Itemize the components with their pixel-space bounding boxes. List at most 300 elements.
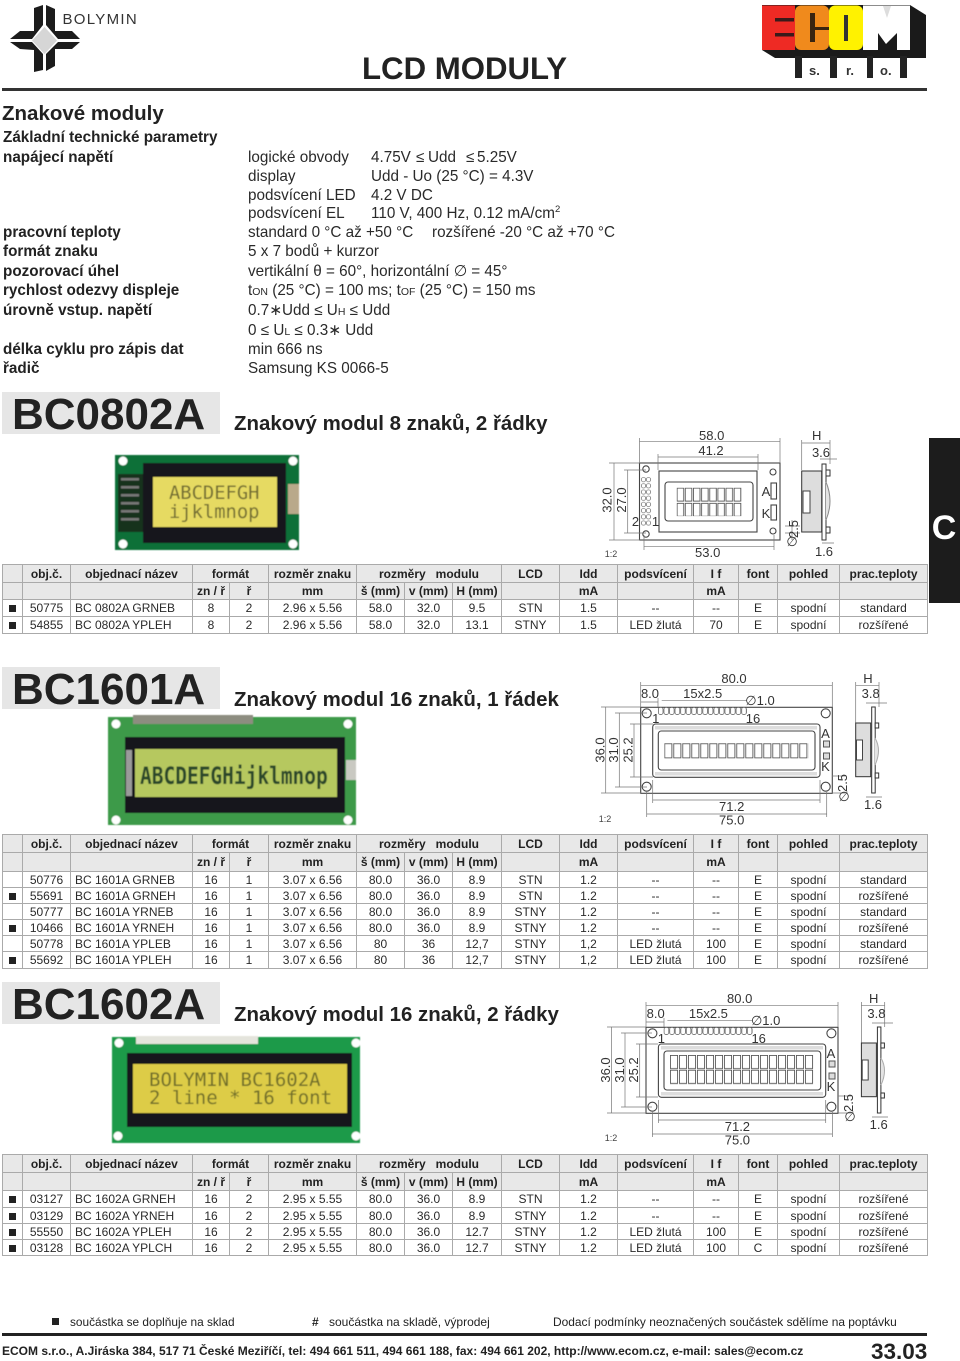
technical parameters: rychlost odezvy displeje xyxy=(3,282,179,299)
diagram: BC1601A dimensions: 80.0 xyxy=(721,671,747,686)
table: BC1601A parameters: 36 xyxy=(422,953,435,967)
table: BC0802A parameters: podsvícení xyxy=(624,566,687,580)
table: BC1601A parameters: BC 1601A YPLEH xyxy=(75,953,172,967)
table: BC1602A parameters: v (mm) xyxy=(409,1174,448,1188)
table: BC0802A parameters: H (mm) xyxy=(456,584,498,598)
table: BC1602A parameters: 36.0 xyxy=(417,1192,440,1206)
diagram: BC1602A dimensions xyxy=(598,991,893,1148)
table: BC1601A parameters: rozšířené xyxy=(858,889,909,903)
table: BC1602A parameters: 1.2 xyxy=(580,1241,597,1255)
table: BC1602A parameters: 1.2 xyxy=(580,1225,597,1239)
heading: BC1602A: Znakový modul 16 znaků, 2 řádky xyxy=(234,1003,559,1026)
table: BC1601A parameters: BC 1601A YPLEB xyxy=(75,937,171,951)
diagram: BC1601A dimensions: H xyxy=(863,671,873,686)
table: BC1602A parameters: rozměry modulu xyxy=(379,1156,479,1170)
table: BC1602A parameters: STNY xyxy=(514,1209,546,1223)
table: BC1601A parameters: standard xyxy=(860,905,907,919)
table: BC1602A parameters: obj.č. xyxy=(31,1156,62,1170)
table: BC1601A parameters: mA xyxy=(579,855,598,869)
table: BC1601A parameters: 1 xyxy=(246,873,252,887)
table: BC1602A parameters: 80.0 xyxy=(369,1241,392,1255)
table: BC0802A parameters: formát xyxy=(212,566,249,580)
table: BC1602A parameters: E xyxy=(754,1225,762,1239)
table: BC1602A parameters: 16 xyxy=(204,1209,218,1223)
table: BC0802A parameters: BC 0802A YPLEH xyxy=(75,618,172,632)
table: BC1602A parameters: 80.0 xyxy=(369,1209,392,1223)
table: BC1601A parameters: pohled xyxy=(789,836,828,850)
table: BC1601A parameters: 16 xyxy=(204,921,218,935)
table: BC1601A parameters: BC 1601A YRNEH xyxy=(75,921,174,935)
diagram: BC0802A dimensions: 1 xyxy=(652,514,659,529)
diagram: BC1602A dimensions: 71.2 xyxy=(725,1119,750,1134)
diagram: BC0802A dimensions: 1:2 xyxy=(605,549,617,559)
table: BC1602A parameters: rozšířené xyxy=(858,1241,909,1255)
legend: Dodací podmínky neoznačených součástek sdělíme na poptávku xyxy=(553,1315,897,1329)
legend: # xyxy=(312,1315,319,1329)
table: BC1601A parameters: 1 xyxy=(246,937,252,951)
table: BC0802A parameters: Idd xyxy=(580,566,598,580)
diagram: BC1602A dimensions: ∅ xyxy=(844,1109,856,1124)
table: BC0802A parameters: obj.č. xyxy=(31,566,62,580)
table: BC1602A parameters: I f xyxy=(711,1156,721,1170)
table: BC0802A parameters: mm xyxy=(302,584,323,598)
photo: BC0802A module: ABCDEFGH xyxy=(169,483,259,504)
table: BC1601A parameters: 1 xyxy=(246,921,252,935)
title: LCD MODULY xyxy=(362,51,567,86)
technical parameters: Udd - Uo (25 °C) = 4.3V xyxy=(371,168,534,185)
table: BC1601A parameters: prac.teploty xyxy=(849,836,918,850)
table: BC1601A parameters: E xyxy=(754,889,762,903)
photo: BC1602A module xyxy=(112,1036,360,1143)
table: BC0802A parameters: -- xyxy=(712,601,720,615)
footer contact: ECOM s.r.o., A.Jiráska 384, 517 71 České Meziříčí, tel: 494 661 511, 494 661 188, fax: 494 661 202, http://www.ecom.cz, e-mail: sales@ecom.cz xyxy=(2,1343,803,1358)
photo: BC1602A module: 2 line * 16 font xyxy=(149,1087,332,1109)
table: BC0802A parameters: 1.5 xyxy=(580,601,597,615)
table: BC1602A parameters: rozšířené xyxy=(858,1209,909,1223)
table: BC1601A parameters: rozšířené xyxy=(858,921,909,935)
table: BC1601A parameters: font xyxy=(747,836,769,850)
table: BC1601A parameters: E xyxy=(754,921,762,935)
table: BC1601A parameters: -- xyxy=(712,873,720,887)
table: BC1601A parameters: standard xyxy=(860,937,907,951)
table: BC1601A parameters: 36 xyxy=(422,937,435,951)
table: BC1602A parameters: BC 1602A YPLEH xyxy=(75,1225,172,1239)
table: BC1601A parameters: 1,2 xyxy=(580,953,597,967)
diagram: BC1602A dimensions: 80.0 xyxy=(727,991,752,1006)
table: BC0802A parameters: 1.5 xyxy=(580,618,597,632)
table: BC1602A parameters: 16 xyxy=(204,1225,218,1239)
legend: součástka se doplňuje na sklad xyxy=(70,1315,235,1329)
table: BC1601A parameters: zn / ř xyxy=(197,855,225,869)
table: BC1602A parameters: E xyxy=(754,1209,762,1223)
table: BC1602A parameters: 03128 xyxy=(30,1241,63,1255)
diagram: BC0802A dimensions: 27.0 xyxy=(614,487,629,513)
table: BC1601A parameters: rozšířené xyxy=(858,953,909,967)
diagram: BC1601A dimensions: 3.8 xyxy=(862,686,880,701)
table: BC1602A parameters: 36.0 xyxy=(417,1225,440,1239)
logo: ECOM s.r.o.: s. xyxy=(809,63,820,78)
table: BC1601A parameters: 16 xyxy=(204,873,218,887)
diagram: BC0802A dimensions: 2.5 xyxy=(786,520,801,538)
diagram: BC1601A dimensions: 25.2 xyxy=(620,737,636,763)
table: BC1601A parameters: 80.0 xyxy=(369,905,392,919)
diagram: BC1601A dimensions: 71.2 xyxy=(719,799,744,814)
technical parameters: Samsung KS 0066-5 xyxy=(248,360,389,377)
table: BC1602A parameters: mA xyxy=(706,1174,726,1188)
section tab: C: C xyxy=(932,509,956,547)
table: BC1601A parameters: š (mm) xyxy=(361,855,400,869)
logo: ECOM s.r.o.: o. xyxy=(880,63,892,78)
table: BC1602A parameters: 03127 xyxy=(30,1192,63,1206)
table: BC0802A parameters: 32.0 xyxy=(417,618,440,632)
table: BC1602A parameters: ř xyxy=(247,1174,251,1188)
table: BC1601A parameters: ř xyxy=(247,855,251,869)
heading: BC1601A: BC1601A xyxy=(12,665,205,714)
table: BC1602A parameters: 80.0 xyxy=(369,1225,392,1239)
table: BC0802A parameters: pohled xyxy=(789,566,828,580)
table: BC1601A parameters: STNY xyxy=(514,937,546,951)
table: BC1601A parameters: 3.07 x 6.56 xyxy=(283,953,342,967)
diagram: BC0802A dimensions: A xyxy=(762,484,771,499)
table: BC0802A parameters: E xyxy=(754,618,762,632)
diagram: BC1602A dimensions: 1.6 xyxy=(870,1117,888,1132)
diagram: BC1602A dimensions: 2.5 xyxy=(841,1094,856,1112)
table: BC1602A parameters: 12.7 xyxy=(465,1241,489,1255)
table: BC1602A parameters: 2.95 x 5.55 xyxy=(283,1192,342,1206)
diagram: BC0802A dimensions: K xyxy=(762,506,771,521)
table: BC1602A parameters: 2 xyxy=(246,1192,252,1206)
table: BC1601A parameters: Idd xyxy=(580,836,598,850)
table: BC0802A parameters: š (mm) xyxy=(361,584,400,598)
table: BC1601A parameters: v (mm) xyxy=(409,855,448,869)
diagram: BC1601A dimensions: 36.0 xyxy=(592,737,608,763)
logo: ECOM s.r.o. xyxy=(762,5,926,78)
technical parameters xyxy=(3,129,615,377)
table: BC1601A parameters: obj.č. xyxy=(31,836,62,850)
table: BC1601A parameters: 80 xyxy=(374,937,387,951)
heading: BC1602A xyxy=(2,980,559,1029)
table: BC1601A parameters: -- xyxy=(652,889,660,903)
table: BC1601A parameters: E xyxy=(754,873,762,887)
table: BC1601A parameters: spodní xyxy=(790,873,827,887)
diagram: BC1601A dimensions: 1:2 xyxy=(599,814,611,824)
technical parameters: 5.25V xyxy=(477,149,518,166)
table: BC0802A parameters: 2.96 x 5.56 xyxy=(283,618,342,632)
table: BC1602A parameters: BC 1602A YPLCH xyxy=(75,1241,172,1255)
table: BC1602A parameters: 1.2 xyxy=(580,1209,597,1223)
table: BC0802A parameters: mA xyxy=(579,584,598,598)
table: BC1602A parameters: formát xyxy=(212,1156,249,1170)
table: BC1601A parameters: 8.9 xyxy=(469,921,485,935)
table: BC0802A parameters: 50775 xyxy=(30,601,63,615)
diagram: BC1601A dimensions: ∅1.0 xyxy=(745,693,775,708)
table: BC0802A parameters: 8 xyxy=(208,618,214,632)
table: BC0802A parameters: v (mm) xyxy=(409,584,448,598)
table: BC0802A parameters: E xyxy=(754,601,762,615)
table: BC1602A parameters: 8.9 xyxy=(469,1192,485,1206)
table: BC1602A parameters: pohled xyxy=(789,1156,828,1170)
table: BC1601A parameters: STN xyxy=(518,889,542,903)
diagram: BC1602A dimensions: K xyxy=(827,1079,836,1094)
table: BC1601A parameters: E xyxy=(754,937,762,951)
table: BC0802A parameters: 8 xyxy=(208,601,214,615)
table: BC1602A parameters: prac.teploty xyxy=(849,1156,918,1170)
table: BC1602A parameters: podsvícení xyxy=(624,1156,687,1170)
table: BC1601A parameters: -- xyxy=(712,905,720,919)
table: BC1601A parameters: LED žlutá xyxy=(629,937,682,951)
heading: BC1601A: Znakový modul 16 znaků, 1 řádek xyxy=(234,688,559,711)
photo: BC1602A module: BOLYMIN BC1602A xyxy=(149,1069,321,1091)
table: BC1602A parameters: rozměr znaku xyxy=(274,1156,351,1170)
table: BC0802A parameters: mA xyxy=(706,584,726,598)
table: BC1601A parameters: 36.0 xyxy=(417,889,440,903)
logo: ECOM s.r.o.: r. xyxy=(846,63,854,78)
technical parameters: Základní technické parametry xyxy=(3,129,218,146)
diagram: BC1602A dimensions: 8.0 xyxy=(647,1006,665,1021)
technical parameters: standard 0 °C až +50 °C xyxy=(248,224,413,241)
technical parameters: 4.75V xyxy=(371,149,412,166)
table: BC1602A parameters: STN xyxy=(518,1192,542,1206)
table: BC1601A parameters: formát xyxy=(212,836,249,850)
table: BC1601A parameters: 16 xyxy=(204,937,218,951)
table: BC1601A parameters: 8.9 xyxy=(469,873,485,887)
table: BC1602A parameters: -- xyxy=(652,1209,660,1223)
diagram: BC0802A dimensions: ∅ xyxy=(786,534,798,549)
table: BC0802A parameters: LCD xyxy=(518,566,543,580)
diagram: BC1602A dimensions: 15x2.5 xyxy=(689,1006,728,1021)
table: BC1602A parameters: LED žlutá xyxy=(629,1225,682,1239)
photo: BC0802A module xyxy=(115,455,299,550)
table: BC1602A parameters: 12.7 xyxy=(465,1225,489,1239)
table: BC1601A parameters: 50778 xyxy=(30,937,63,951)
table: BC1601A parameters: 55691 xyxy=(30,889,63,903)
diagram: BC0802A dimensions: 2 xyxy=(632,514,639,529)
diagram: BC0802A dimensions: 41.2 xyxy=(698,443,724,458)
table: BC1601A parameters: 1.2 xyxy=(580,873,597,887)
table: BC1602A parameters: 100 xyxy=(706,1241,726,1255)
table: BC1602A parameters: 2 xyxy=(246,1241,252,1255)
table: BC1602A parameters: spodní xyxy=(790,1192,827,1206)
diagram: BC1601A dimensions: 15x2.5 xyxy=(683,686,722,701)
diagram: BC1602A dimensions: 1 xyxy=(658,1031,665,1046)
table: BC1601A parameters: 3.07 x 6.56 xyxy=(283,873,342,887)
diagram: BC1602A dimensions: ∅1.0 xyxy=(751,1013,780,1028)
table: BC1601A parameters: 1 xyxy=(246,905,252,919)
table: BC1601A parameters: 3.07 x 6.56 xyxy=(283,921,342,935)
table: BC1601A parameters: objednací název xyxy=(85,836,178,850)
table: BC1601A parameters: 36.0 xyxy=(417,921,440,935)
heading: BC0802A: Znakový modul 8 znaků, 2 řádky xyxy=(234,412,548,435)
table: BC1602A parameters: 100 xyxy=(706,1225,726,1239)
technical parameters: ≤ xyxy=(416,149,424,166)
table: BC0802A parameters: 32.0 xyxy=(417,601,440,615)
diagram: BC1601A dimensions: 1 xyxy=(652,711,659,726)
table: BC1602A parameters: rozšířené xyxy=(858,1225,909,1239)
diagram: BC1601A dimensions: A xyxy=(821,726,830,741)
table: BC1601A parameters: E xyxy=(754,953,762,967)
table: BC1602A parameters: 80.0 xyxy=(369,1192,392,1206)
table: BC1601A parameters: 16 xyxy=(204,905,218,919)
diagram: BC1601A dimensions: 2.5 xyxy=(835,774,850,792)
heading: BC1601A xyxy=(2,665,559,714)
table: BC1601A parameters: 80.0 xyxy=(369,921,392,935)
table: BC1601A parameters: -- xyxy=(652,873,660,887)
photo: BC1601A module xyxy=(108,715,356,825)
diagram: BC0802A dimensions xyxy=(600,428,837,560)
table: BC1601A parameters: BC 1601A YRNEB xyxy=(75,905,174,919)
technical parameters: 2 xyxy=(555,204,560,215)
table: BC1602A parameters: 2.95 x 5.55 xyxy=(283,1209,342,1223)
table: BC0802A parameters: font xyxy=(747,566,769,580)
table: BC1601A parameters: H (mm) xyxy=(456,855,498,869)
table: BC0802A parameters: objednací název xyxy=(85,566,178,580)
diagram: BC1601A dimensions: 1.6 xyxy=(864,797,882,812)
table: BC1601A parameters: STNY xyxy=(514,921,546,935)
table: BC1601A parameters: spodní xyxy=(790,921,827,935)
table: BC1602A parameters: 55550 xyxy=(30,1225,63,1239)
photo: BC0802A module: ijklmnop xyxy=(169,502,259,523)
technical parameters: logické obvody xyxy=(248,149,349,166)
table: BC1601A parameters: -- xyxy=(712,921,720,935)
table: BC0802A parameters: spodní xyxy=(790,618,827,632)
table: BC1602A parameters: objednací název xyxy=(85,1156,178,1170)
table: BC1602A parameters: 16 xyxy=(204,1192,218,1206)
table: BC1601A parameters: standard xyxy=(860,873,907,887)
table: BC1601A parameters: mm xyxy=(302,855,323,869)
diagram: BC1601A dimensions: 8.0 xyxy=(641,686,659,701)
table: BC0802A parameters: spodní xyxy=(790,601,827,615)
table: BC1601A parameters: 1 xyxy=(246,889,252,903)
technical parameters: ≤ xyxy=(466,149,474,166)
table: BC0802A parameters: -- xyxy=(652,601,660,615)
technical parameters: pozorovací úhel xyxy=(3,263,119,280)
table: BC0802A parameters: zn / ř xyxy=(197,584,225,598)
diagram: BC1601A dimensions: ∅ xyxy=(838,789,850,804)
table: BC1602A parameters: STNY xyxy=(514,1241,546,1255)
technical parameters: podsvícení LED xyxy=(248,187,356,204)
diagram: BC1601A dimensions: K xyxy=(821,759,830,774)
table: BC1602A parameters: LCD xyxy=(518,1156,543,1170)
table: BC1601A parameters: 80.0 xyxy=(369,889,392,903)
heading: BC1602A: BC1602A xyxy=(12,980,205,1029)
technical parameters: formát znaku xyxy=(3,243,98,260)
table: BC1601A parameters: 1.2 xyxy=(580,921,597,935)
diagram: BC1602A dimensions: 3.8 xyxy=(867,1006,885,1021)
table: BC1602A parameters: font xyxy=(747,1156,769,1170)
table: BC1601A parameters: -- xyxy=(712,889,720,903)
table: BC1601A parameters: 3.07 x 6.56 xyxy=(283,937,342,951)
table: BC1601A parameters: BC 1601A GRNEB xyxy=(75,873,175,887)
table: BC1602A parameters: spodní xyxy=(790,1209,827,1223)
table: BC1601A parameters: 1 xyxy=(246,953,252,967)
technical parameters: 0.7∗Udd ≤ UH ≤ Udd xyxy=(248,302,390,319)
table: BC0802A parameters: STNY xyxy=(514,618,546,632)
technical parameters: tON (25 °C) = 100 ms; tOF (25 °C) = 150 ms xyxy=(248,282,536,299)
table: BC1601A parameters: 3.07 x 6.56 xyxy=(283,889,342,903)
table: BC1602A parameters: mm xyxy=(302,1174,323,1188)
table: BC1602A parameters: Idd xyxy=(580,1156,598,1170)
table: BC1602A parameters: 1.2 xyxy=(580,1192,597,1206)
table: BC1601A parameters: 36.0 xyxy=(417,873,440,887)
table: BC1601A parameters: 12,7 xyxy=(465,937,489,951)
table: BC1601A parameters: 100 xyxy=(706,937,726,951)
technical parameters: úrovně vstup. napětí xyxy=(3,302,153,319)
table: BC1601A parameters: -- xyxy=(652,905,660,919)
table: BC0802A parameters: rozšířené xyxy=(858,618,909,632)
table: BC1601A parameters: spodní xyxy=(790,905,827,919)
technical parameters: pracovní teploty xyxy=(3,224,121,241)
table: BC1601A parameters: STNY xyxy=(514,905,546,919)
table: BC1602A parameters: -- xyxy=(712,1209,720,1223)
table: BC1602A parameters: BC 1602A YRNEH xyxy=(75,1209,174,1223)
table: BC1602A parameters: E xyxy=(754,1192,762,1206)
diagram: BC1602A dimensions: 75.0 xyxy=(725,1132,750,1148)
table: BC1601A parameters: spodní xyxy=(790,937,827,951)
table: BC1601A parameters: 80.0 xyxy=(369,873,392,887)
table: BC1602A parameters xyxy=(2,1154,928,1256)
technical parameters: řadič xyxy=(3,360,40,377)
table: BC1601A parameters: rozměr znaku xyxy=(274,836,351,850)
table: BC1602A parameters: 36.0 xyxy=(417,1209,440,1223)
table: BC1601A parameters: 8.9 xyxy=(469,905,485,919)
diagram: BC0802A dimensions: 1.6 xyxy=(815,544,833,559)
table: BC1601A parameters: 50777 xyxy=(30,905,63,919)
table: BC1601A parameters: 50776 xyxy=(30,873,63,887)
table: BC1601A parameters: BC 1601A GRNEH xyxy=(75,889,176,903)
photo: BC1601A module: ABCDEFGHijklmnop xyxy=(140,763,328,791)
table: BC1602A parameters: STNY xyxy=(514,1225,546,1239)
table: BC1601A parameters: 55692 xyxy=(30,953,63,967)
table: BC1601A parameters: 3.07 x 6.56 xyxy=(283,905,342,919)
diagram: BC1602A dimensions: 25.2 xyxy=(626,1057,641,1083)
technical parameters: Udd xyxy=(428,149,456,166)
table: BC1602A parameters: spodní xyxy=(790,1225,827,1239)
table: BC0802A parameters: prac.teploty xyxy=(849,566,918,580)
table: BC1602A parameters: mA xyxy=(579,1174,598,1188)
table: BC1601A parameters: rozměry modulu xyxy=(379,836,479,850)
technical parameters: rozšířené -20 °C až +70 °C xyxy=(432,224,615,241)
technical parameters: min 666 ns xyxy=(248,341,323,358)
table: BC1602A parameters: 2.95 x 5.55 xyxy=(283,1241,342,1255)
diagram: BC1602A dimensions: 16 xyxy=(751,1031,766,1046)
diagram: BC0802A dimensions: 53.0 xyxy=(695,545,720,560)
table: BC1601A parameters: podsvícení xyxy=(624,836,687,850)
table: BC1601A parameters: 16 xyxy=(204,953,218,967)
table: BC1601A parameters: LCD xyxy=(518,836,543,850)
diagram: BC1602A dimensions: 36.0 xyxy=(598,1057,613,1083)
table: BC1601A parameters: -- xyxy=(652,921,660,935)
diagram: BC0802A dimensions: 58.0 xyxy=(699,428,724,443)
logo: Bolymin: BOLYMIN xyxy=(62,11,138,28)
technical parameters: 0 ≤ UL ≤ 0.3∗ Udd xyxy=(248,322,373,339)
diagram: BC1602A dimensions: 31.0 xyxy=(612,1057,627,1083)
heading: BC0802A xyxy=(2,390,548,439)
table: BC1601A parameters xyxy=(2,834,928,969)
table: BC0802A parameters: 2 xyxy=(246,601,252,615)
legend xyxy=(52,1315,897,1329)
table: BC1602A parameters: 36.0 xyxy=(417,1241,440,1255)
table: BC1602A parameters: 2 xyxy=(246,1209,252,1223)
table: BC1601A parameters: 80 xyxy=(374,953,387,967)
table: BC0802A parameters: 2.96 x 5.56 xyxy=(283,601,342,615)
table: BC0802A parameters: LED žlutá xyxy=(629,618,682,632)
table: BC1601A parameters: 1,2 xyxy=(580,937,597,951)
table: BC1601A parameters: 16 xyxy=(204,889,218,903)
table: BC1602A parameters: -- xyxy=(652,1192,660,1206)
legend: součástka na skladě, výprodej xyxy=(329,1315,490,1329)
table: BC1601A parameters: 100 xyxy=(706,953,726,967)
table: BC1601A parameters: STNY xyxy=(514,953,546,967)
